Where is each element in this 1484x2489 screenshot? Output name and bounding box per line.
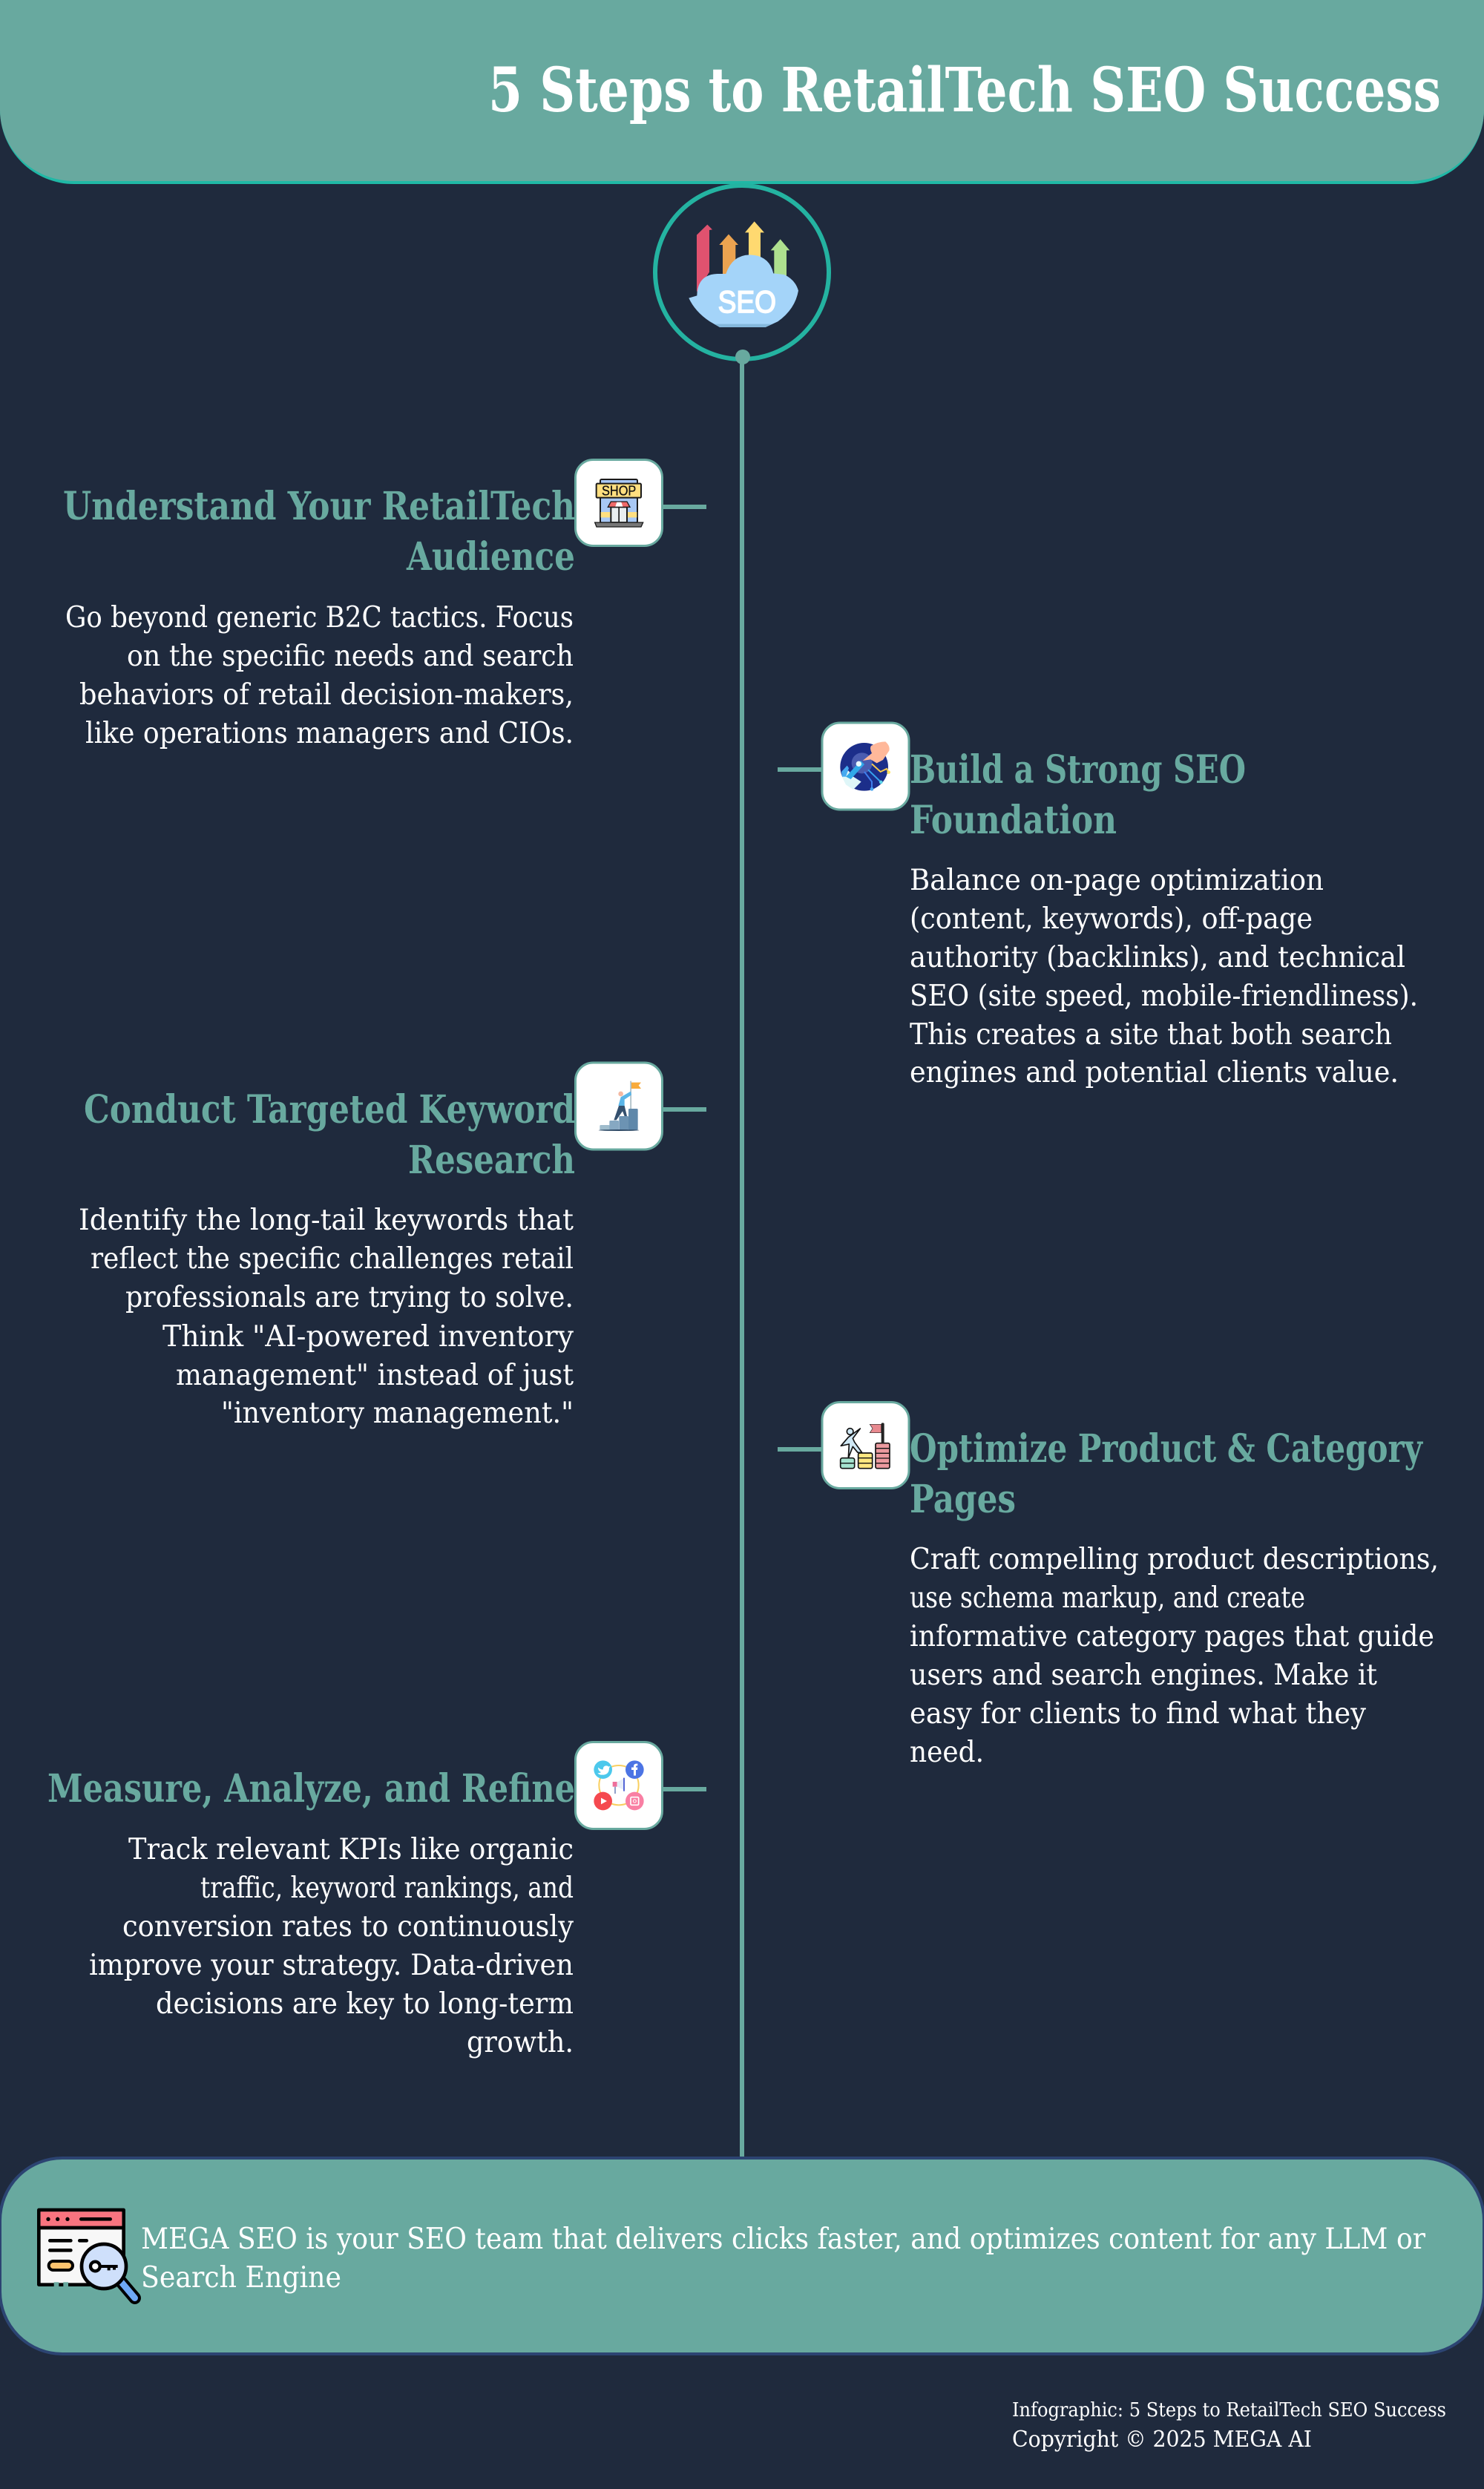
step 3 heading: Research bbox=[408, 1138, 575, 1183]
step 2 text: (content, keywords), off-page bbox=[910, 902, 1313, 936]
step 4 text: informative category pages that guide bbox=[910, 1620, 1434, 1653]
step 5 text bbox=[89, 1833, 574, 2059]
step 1 heading: Understand Your RetailTech bbox=[63, 484, 575, 529]
icon: shop bbox=[576, 460, 662, 546]
step 5 text: growth. bbox=[467, 2026, 574, 2059]
panel: step 3 bbox=[79, 1063, 706, 1430]
step 3 text: management" instead of just bbox=[176, 1359, 574, 1392]
step 1 text: behaviors of retail decision-makers, bbox=[79, 678, 574, 712]
step 3 heading: Conduct Targeted Keyword bbox=[84, 1087, 575, 1132]
icon: flag on steps bbox=[576, 1063, 662, 1150]
step 3 text bbox=[79, 1204, 574, 1430]
panel: step 2 bbox=[778, 723, 1418, 1089]
step 2 connector bbox=[778, 767, 821, 772]
step 4 text: Craft compelling product descriptions, bbox=[910, 1543, 1439, 1576]
icon: shop: SHOP bbox=[602, 482, 636, 498]
step 1 text bbox=[65, 601, 574, 750]
icon: climber and flag bbox=[822, 1403, 909, 1489]
panel: step 5 bbox=[47, 1742, 706, 2059]
step 4 text: easy for clients to find what they bbox=[910, 1697, 1366, 1731]
step 4 text: need. bbox=[910, 1736, 984, 1769]
panel: call to action bbox=[0, 2158, 1484, 2354]
step 2 text: authority (backlinks), and technical bbox=[910, 941, 1405, 974]
step 2 heading: Foundation bbox=[910, 798, 1117, 843]
step 2 text: This creates a site that both search bbox=[910, 1018, 1392, 1052]
step 3 text: reflect the specific challenges retail bbox=[91, 1242, 574, 1276]
step 4 text: use schema markup, and create bbox=[910, 1581, 1305, 1615]
step 5 text: Track relevant KPIs like organic bbox=[128, 1833, 574, 1866]
step 1 connector bbox=[663, 505, 706, 509]
step 3 text: professionals are trying to solve. bbox=[125, 1281, 574, 1314]
step 4 text bbox=[910, 1543, 1439, 1769]
footer credit bbox=[1012, 2399, 1446, 2452]
step 2 text: SEO (site speed, mobile-friendliness). bbox=[910, 980, 1418, 1013]
icon: SEO cloud in circle bbox=[655, 186, 829, 364]
icon: SEO cloud in circle: SEO bbox=[718, 284, 776, 319]
step 2 heading bbox=[910, 747, 1246, 843]
step 3 connector bbox=[663, 1107, 706, 1112]
footer credit: Copyright © 2025 MEGA AI bbox=[1012, 2427, 1312, 2452]
step 2 text: engines and potential clients value. bbox=[910, 1056, 1399, 1089]
call to action text: Search Engine bbox=[141, 2261, 341, 2295]
step 4 heading: Pages bbox=[910, 1477, 1016, 1522]
step 3 text: "inventory management." bbox=[221, 1397, 574, 1430]
step 1 text: on the specific needs and search bbox=[127, 640, 574, 673]
step 5 heading: Measure, Analyze, and Refine bbox=[47, 1766, 575, 1811]
step 4 connector bbox=[778, 1447, 821, 1452]
call to action text bbox=[141, 2223, 1425, 2295]
footer credit: Infographic: 5 Steps to RetailTech SEO Success bbox=[1012, 2399, 1446, 2421]
panel: step 4 bbox=[778, 1403, 1439, 1769]
icon: social media bbox=[576, 1742, 662, 1829]
step 5 text: traffic, keyword rankings, and bbox=[200, 1872, 574, 1905]
icon: keyword search window bbox=[39, 2210, 135, 2298]
timeline line bbox=[740, 357, 744, 2159]
step 3 heading bbox=[84, 1087, 575, 1183]
step 1 text: like operations managers and CIOs. bbox=[85, 717, 574, 750]
step 1 text: Go beyond generic B2C tactics. Focus bbox=[65, 601, 574, 634]
step 2 heading: Build a Strong SEO bbox=[910, 747, 1246, 793]
icon: circuit hand bbox=[822, 723, 909, 810]
step 5 text: improve your strategy. Data-driven bbox=[89, 1949, 574, 1982]
step 4 text: users and search engines. Make it bbox=[910, 1659, 1377, 1692]
step 2 text bbox=[910, 864, 1418, 1089]
step 1 heading bbox=[63, 484, 575, 580]
step 4 heading bbox=[910, 1426, 1423, 1522]
panel: step 1 bbox=[63, 460, 706, 750]
step 2 text: Balance on-page optimization bbox=[910, 864, 1324, 897]
step 3 text: Think "AI-powered inventory bbox=[162, 1320, 574, 1354]
step 5 connector bbox=[663, 1787, 706, 1791]
step 1 heading: Audience bbox=[406, 534, 575, 580]
step 5 text: decisions are key to long-term bbox=[156, 1987, 574, 2021]
step 5 text: conversion rates to continuously bbox=[122, 1910, 574, 1944]
header banner bbox=[0, 0, 1484, 184]
step 3 text: Identify the long-tail keywords that bbox=[79, 1204, 574, 1237]
